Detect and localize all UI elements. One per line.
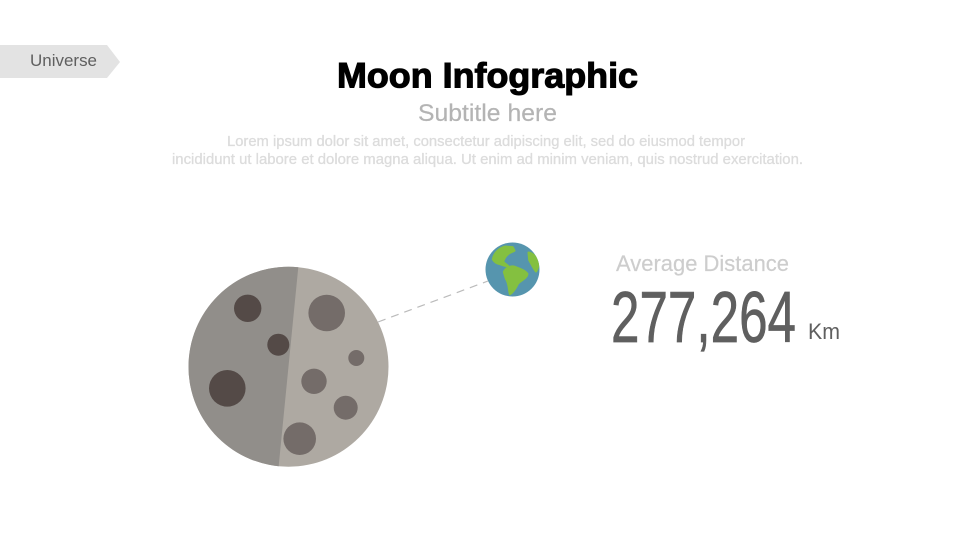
icon: earth (486, 242, 540, 296)
infographic canvas (0, 45, 839, 467)
light craters (283, 295, 364, 455)
subtitle: Subtitle here (418, 100, 557, 127)
description text (172, 134, 803, 168)
dashed connector from moon to earth (378, 281, 488, 322)
section tag: Universe (0, 45, 120, 78)
description text: incididunt ut labore et dolore magna aliqua. Ut enim ad minim veniam, quis nostrud exercitation. (172, 152, 803, 168)
section tag: Universe: Universe (30, 52, 97, 70)
icon: moon (180, 260, 388, 473)
continents (493, 247, 538, 294)
stat label: Average Distance (616, 251, 789, 276)
stat value: 277,264 (611, 278, 796, 358)
moon shadow side (188, 266, 298, 466)
description text: Lorem ipsum dolor sit amet, consectetur adipiscing elit, sed do eiusmod tempor (227, 134, 745, 150)
stat unit: Km (808, 319, 840, 344)
dark craters (209, 295, 289, 407)
title: Moon Infographic (337, 56, 638, 96)
stat: average distance (611, 251, 840, 358)
